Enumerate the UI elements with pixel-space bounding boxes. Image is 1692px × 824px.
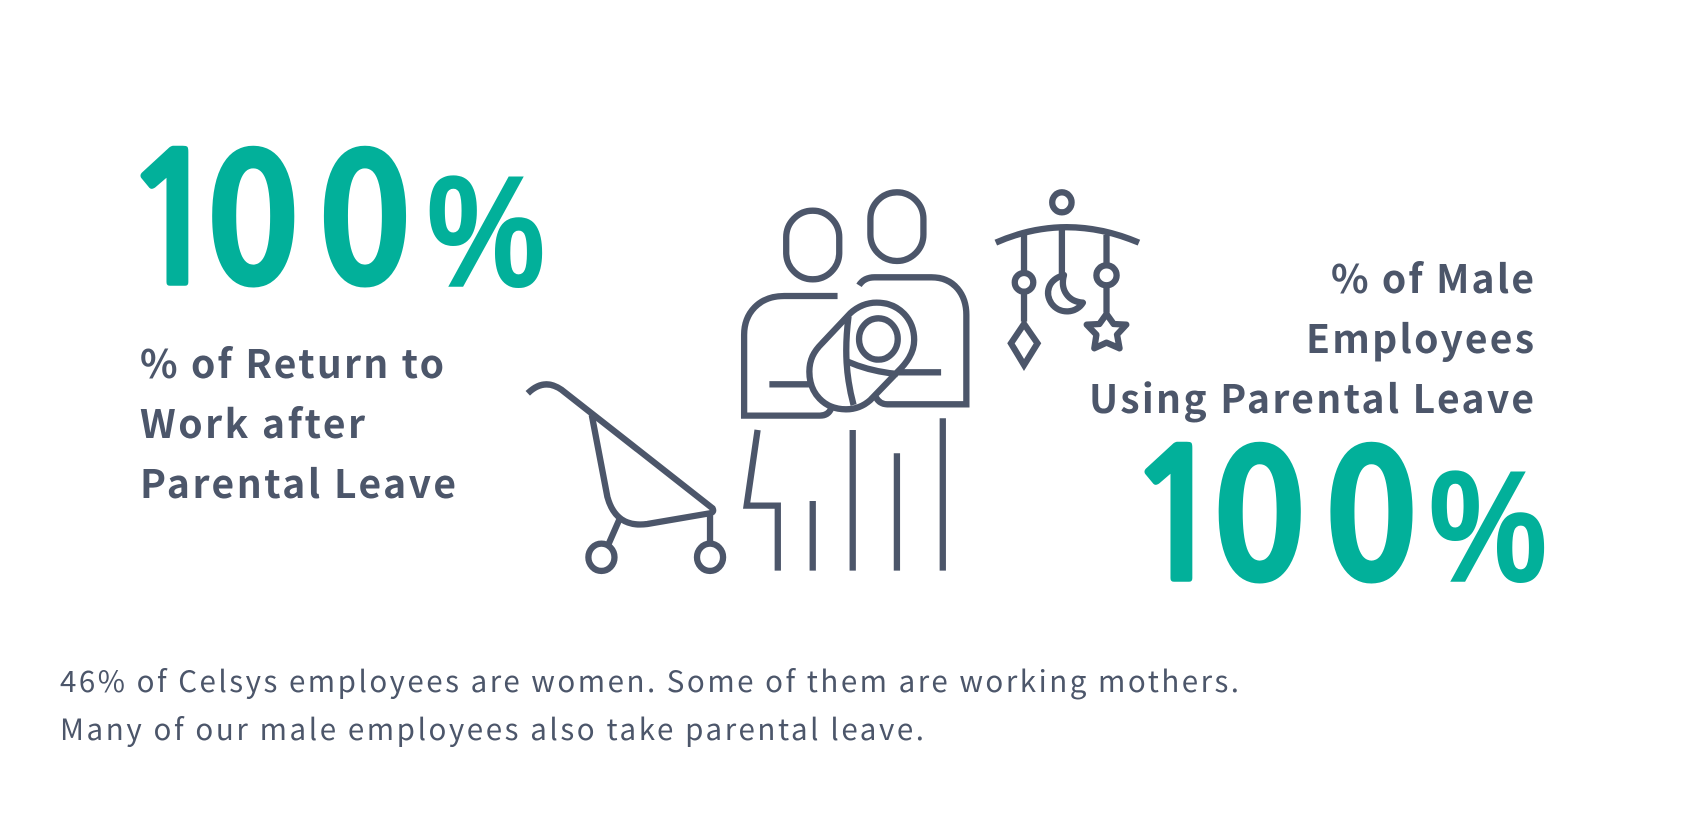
footnote text: 46% of Celsys employees are women. Some of them are working mothers.	[60, 659, 1239, 701]
right statistic: 100%: %	[1429, 439, 1547, 615]
right label: male employees: Employees	[1306, 309, 1534, 365]
right label: male employees: Using Parental Leave	[1089, 369, 1534, 425]
right label: male employees: % of Male	[1331, 249, 1534, 305]
left statistic: 100%: 00	[206, 74, 412, 337]
left label: return to work: Work after	[140, 394, 366, 450]
left label: return to work: % of Return to	[140, 334, 444, 390]
right statistic: 100%: 00	[1212, 370, 1419, 633]
footnote text	[60, 659, 1239, 749]
right statistic: 100%	[1122, 370, 1547, 633]
left statistic: 100%	[118, 74, 545, 337]
icon: mother	[744, 211, 839, 571]
left label: return to work	[140, 334, 456, 510]
left statistic: 100%: %	[427, 144, 545, 320]
left statistic: 100%: 1	[118, 132, 228, 311]
left label: return to work: Parental Leave	[140, 454, 456, 510]
illustration: family with baby	[528, 192, 1139, 571]
icon: stroller	[528, 384, 723, 571]
icon: swaddled baby	[809, 303, 914, 409]
icon: baby mobile	[996, 192, 1139, 365]
right statistic: 100%: 1	[1122, 428, 1232, 607]
right label: male employees	[1089, 249, 1534, 425]
icon: father	[853, 192, 966, 571]
footnote text: Many of our male employees also take parental leave.	[60, 707, 924, 749]
